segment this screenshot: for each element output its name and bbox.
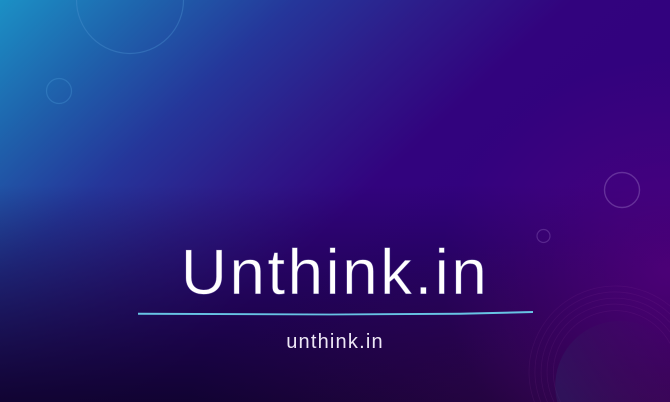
concentric rings: bottom right <box>529 286 670 402</box>
underline <box>138 311 533 315</box>
subtitle: unthink.in <box>286 331 384 353</box>
glow disc: bottom right <box>555 321 670 402</box>
circle: small top left <box>46 78 72 104</box>
circle: small right <box>537 230 550 242</box>
circle: right <box>604 172 640 208</box>
circle: large top left <box>76 0 184 53</box>
title: Unthink.in <box>181 236 489 308</box>
